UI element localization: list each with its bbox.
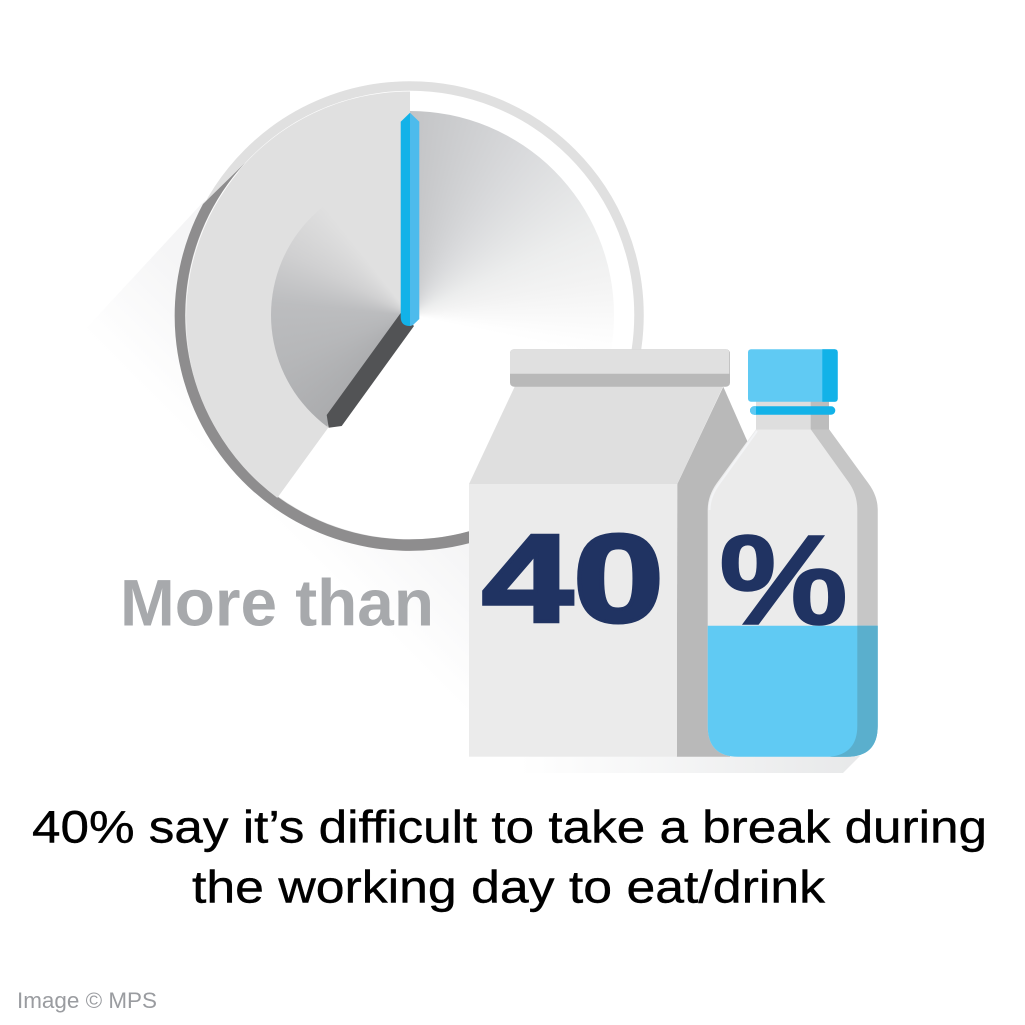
bottle shaded side xyxy=(811,429,878,757)
hour hand xyxy=(327,313,414,428)
minute hand xyxy=(401,113,419,326)
floor shadow xyxy=(470,756,860,773)
water bottle xyxy=(708,349,878,757)
water shaded side xyxy=(830,626,878,757)
bottle ring xyxy=(750,406,835,415)
bottle cap xyxy=(748,349,838,402)
light ring xyxy=(181,86,639,544)
carton side xyxy=(677,387,760,757)
bottle highlight xyxy=(710,431,757,510)
more than label: More than xyxy=(120,566,434,640)
inner gradient sector xyxy=(271,176,549,454)
right gradient sector xyxy=(206,111,614,519)
dark ring arc xyxy=(175,163,470,551)
caption line 1: 40% say it’s difficult to take a break during xyxy=(32,802,987,853)
image credit: Image © MPS xyxy=(17,988,157,1013)
bottle body xyxy=(708,429,878,757)
big number 40: 40 xyxy=(482,510,664,648)
elapsed time sector xyxy=(186,91,410,498)
milk carton xyxy=(469,349,760,757)
clock xyxy=(175,86,639,551)
carton gable xyxy=(469,386,723,484)
caption line 2: the working day to eat/drink xyxy=(192,862,825,913)
percent sign: % xyxy=(719,509,848,652)
background shadow of clock xyxy=(80,200,700,745)
caption xyxy=(32,802,987,913)
carton front xyxy=(469,484,677,757)
carton top fold xyxy=(510,349,730,387)
water xyxy=(708,626,878,757)
clock face xyxy=(181,86,639,544)
bottle neck xyxy=(756,400,811,430)
